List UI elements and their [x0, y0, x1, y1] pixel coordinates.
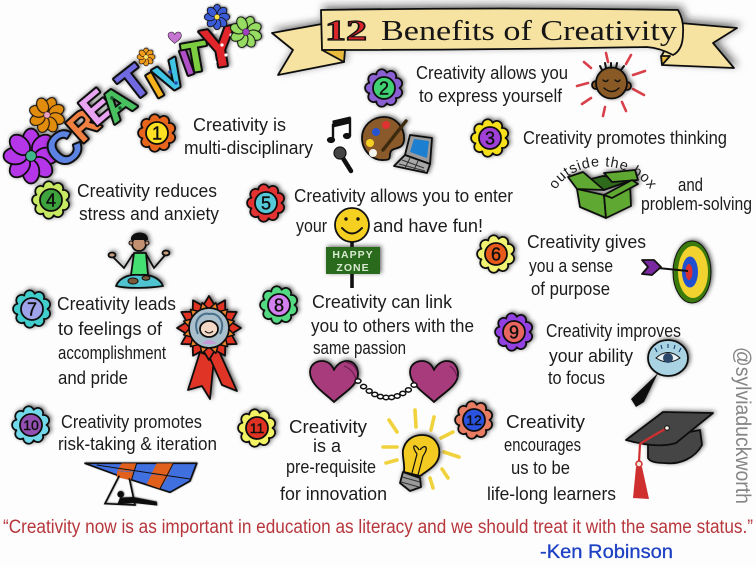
- banner ribbon tails: [272, 8, 737, 75]
- text 12: us to be: [511, 458, 570, 478]
- text 2: to express yourself: [419, 86, 563, 106]
- letters: I: [175, 41, 198, 83]
- badge 2: 2: [379, 78, 389, 98]
- badge 7: [13, 290, 50, 328]
- benefit 10: [12, 406, 217, 506]
- icon: music note: [327, 117, 351, 143]
- badge 1: [138, 114, 175, 152]
- text 3 continued: and: [678, 175, 703, 195]
- badge 4: [32, 181, 69, 219]
- flower: green: [225, 11, 267, 53]
- badge 1: 1: [152, 124, 162, 144]
- text 10: Creativity promotes: [61, 412, 202, 432]
- text 9: your ability: [549, 346, 633, 366]
- curved text: outside the box: outside the box: [551, 156, 656, 190]
- badge 5: [247, 184, 284, 222]
- badge 4: 4: [46, 190, 56, 210]
- text 4: stress and anxiety: [79, 204, 219, 224]
- text 12: life-long learners: [487, 484, 616, 504]
- letters: [36, 14, 243, 177]
- benefit 2: [365, 53, 645, 116]
- text 9: to focus: [548, 368, 605, 388]
- quote attribution: -Ken Robinson: [540, 542, 673, 563]
- letters: T: [179, 31, 213, 82]
- text 11: for innovation: [280, 484, 387, 504]
- icon: magnifying glass with eye: [631, 340, 688, 407]
- icon: graduation cap with tassel: [626, 412, 713, 499]
- badge 8: [260, 286, 297, 324]
- text 1: Creativity is: [193, 115, 286, 135]
- icon: linked hearts: [310, 361, 458, 402]
- text 7: accomplishment: [58, 343, 166, 363]
- banner heading: Benefits of Creativity: [381, 15, 678, 47]
- letters: V: [148, 51, 193, 102]
- letter dots: [110, 30, 233, 110]
- text 5: and have fun!: [373, 216, 483, 236]
- letters: E: [71, 80, 123, 134]
- text 5: your: [296, 216, 327, 236]
- badge 10: [12, 406, 49, 444]
- title banner: [272, 8, 737, 75]
- credit handle: @sylviaduckworth: [731, 347, 754, 504]
- benefit 3: [468, 114, 752, 221]
- text 8: Creativity can link: [312, 292, 453, 312]
- icon: smiley on happy zone sign: HAPPY: [332, 249, 374, 261]
- benefit 4: [32, 181, 219, 288]
- icon: target and arrow: [642, 241, 711, 303]
- icon: award ribbon rosette: [177, 296, 241, 399]
- icon: smiley on happy zone sign: [326, 208, 380, 288]
- text 5: Creativity allows you to enter: [294, 186, 513, 206]
- badge 9: [495, 313, 532, 351]
- flower: small orange: [137, 48, 155, 66]
- text 12: encourages: [504, 435, 581, 455]
- icon: open green box: [568, 170, 638, 218]
- benefit 9: [495, 313, 688, 407]
- text 7: and pride: [58, 368, 128, 388]
- icon: laptop: [394, 135, 432, 173]
- letters: I: [140, 65, 169, 105]
- text 11: pre-requisite: [286, 457, 376, 477]
- badge 12: [455, 401, 492, 439]
- creativity word art: [4, 4, 267, 183]
- icon: meditating person: [108, 232, 170, 288]
- text 8: same passion: [313, 338, 406, 358]
- text 2: Creativity allows you: [416, 63, 568, 83]
- icon: hang glider: [85, 463, 197, 506]
- benefit 12: [455, 401, 713, 504]
- badge 10: 10: [23, 417, 39, 433]
- text 7: Creativity leads: [57, 294, 176, 314]
- letters: A: [91, 76, 143, 131]
- flower: orange: [24, 92, 70, 138]
- badge 12: 12: [466, 412, 482, 428]
- letters: T: [108, 56, 160, 111]
- letters: C: [36, 119, 93, 177]
- badge 8: 8: [274, 296, 284, 316]
- badge 6: 6: [491, 244, 501, 264]
- text 1: multi-disciplinary: [184, 138, 313, 158]
- benefit 11: [238, 409, 459, 504]
- text 10: risk-taking & iteration: [58, 434, 217, 454]
- text 8: you to others with the: [311, 316, 474, 336]
- badge 9: 9: [509, 322, 519, 342]
- badge 3: [471, 119, 508, 157]
- icon: smiley on happy zone sign: ZONE: [336, 262, 370, 274]
- badge 11: 11: [250, 420, 264, 436]
- letters: R: [60, 101, 108, 151]
- text 12: Creativity: [506, 412, 585, 432]
- flower: large purple: [4, 129, 58, 183]
- text 11: Creativity: [289, 417, 367, 437]
- icon: light bulb with rays: [383, 410, 459, 491]
- text 9: Creativity improves: [546, 321, 681, 341]
- text 3: Creativity promotes thinking: [523, 128, 727, 148]
- text 4: Creativity reduces: [77, 181, 217, 201]
- text 11: is a: [313, 436, 342, 456]
- benefit 8: [260, 286, 474, 402]
- text 7: to feelings of: [58, 319, 163, 339]
- badge 11: [238, 409, 275, 447]
- text 6: you a sense: [529, 256, 613, 276]
- text 6: Creativity gives: [527, 232, 646, 252]
- benefit 5: [247, 184, 513, 288]
- benefit 7: [13, 290, 241, 399]
- icon: microphone: [334, 147, 351, 171]
- badge 5: 5: [261, 194, 271, 214]
- benefit 1: [138, 114, 432, 173]
- badge 3: 3: [485, 128, 495, 148]
- flower: blue: [204, 4, 230, 30]
- icon: palette and brush: [362, 117, 406, 160]
- banner number: 12: [325, 16, 367, 47]
- text 6: of purpose: [531, 279, 610, 299]
- heart: [168, 32, 181, 43]
- letters: Y: [196, 14, 243, 81]
- badge 6: [477, 235, 514, 273]
- badge 2: [365, 69, 402, 107]
- icon: smiling face with rays: [577, 53, 645, 116]
- benefit 6: [477, 232, 711, 303]
- banner folds: [322, 50, 345, 62]
- badge 7: 7: [27, 300, 37, 320]
